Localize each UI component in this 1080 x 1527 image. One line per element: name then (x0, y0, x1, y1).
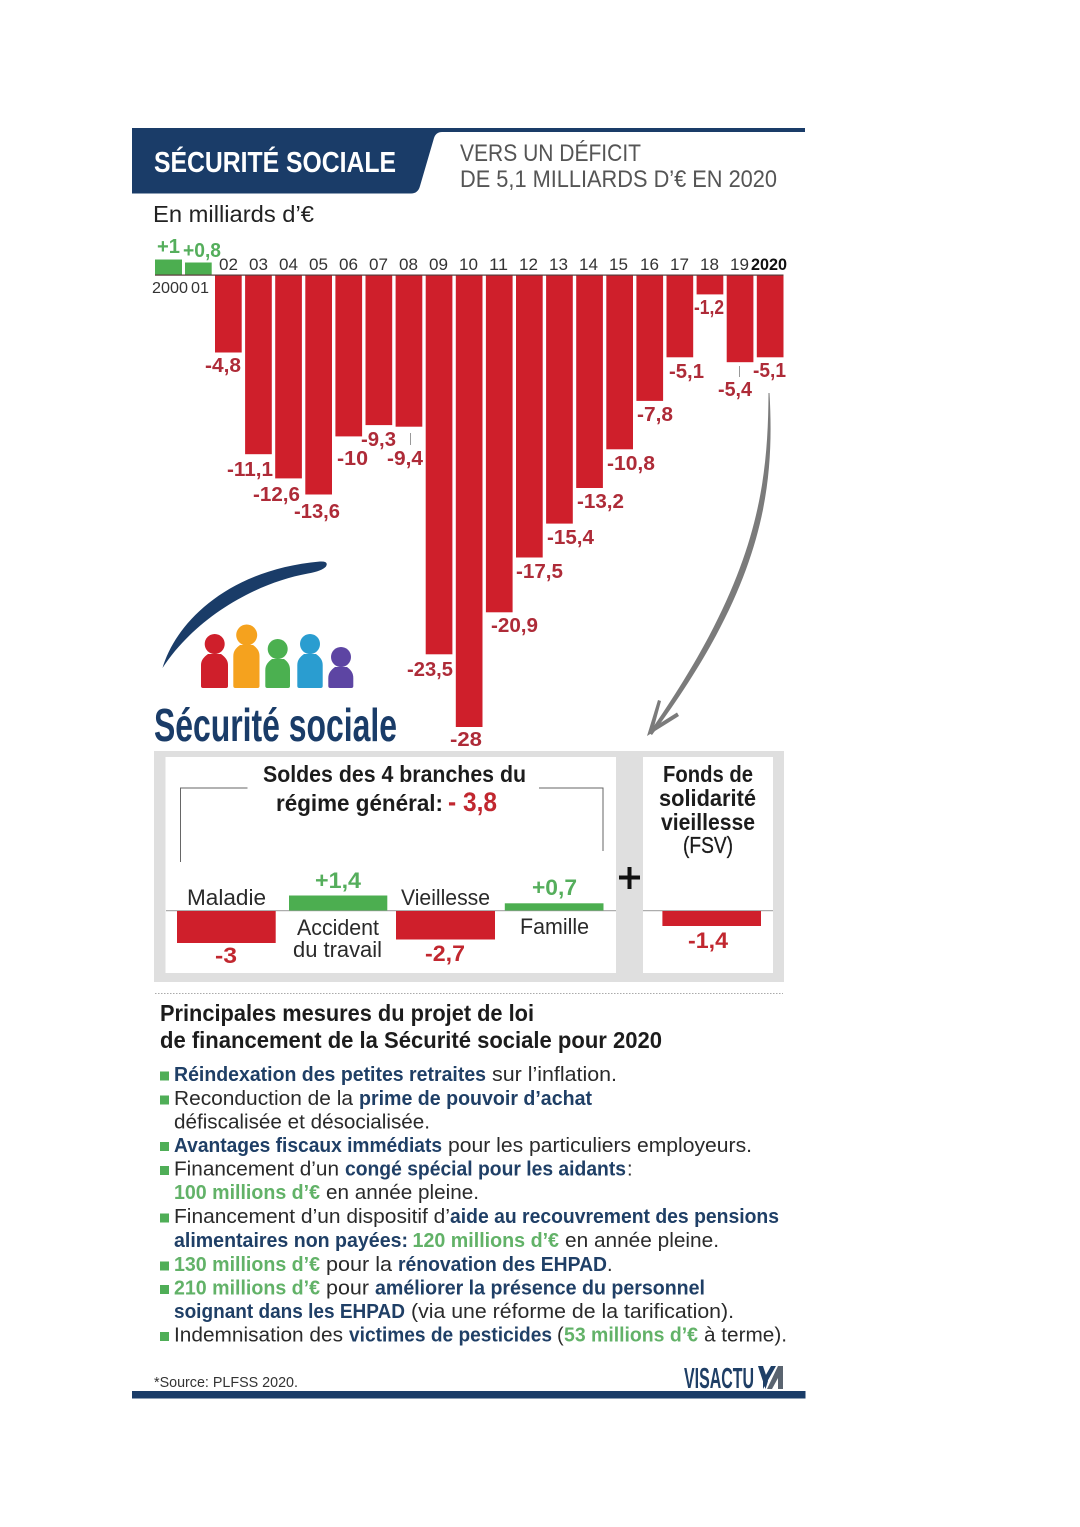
source: *Source: PLFSS 2020. (154, 1374, 298, 1391)
year labels: 13 (549, 255, 568, 274)
FSV heading: vieillesse (661, 809, 755, 835)
measure: purchasing power bonus: prime de pouvoir d’achat (359, 1088, 592, 1110)
branch labels: du travail (293, 937, 382, 962)
measure: pensions: Réindexation des petites retraites (174, 1064, 486, 1086)
measure: nursing home renovation: . (607, 1254, 613, 1276)
panel heading: general scheme: régime général: (276, 790, 443, 816)
measure: pesticide victims: Indemnisation des (174, 1324, 343, 1346)
bar chart: annual balance 2000-2020 (152, 236, 787, 751)
year labels: 05 (309, 255, 328, 274)
branch labels: -2,7 (425, 941, 465, 966)
panel: branches balance and FSV (154, 751, 784, 982)
heading: main measures: de financement de la Sécurité sociale pour 2020 (160, 1027, 662, 1053)
negative bars (215, 275, 784, 727)
measure: care staff: (via une réforme de la tarification). (411, 1301, 734, 1323)
measure: pensions: sur l’inflation. (492, 1064, 617, 1086)
list of measures (160, 1064, 787, 1346)
branch labels: -3 (215, 943, 237, 968)
value labels: +0,8 (183, 240, 221, 262)
value labels: -9,3 (361, 429, 396, 451)
measure: caregiver leave: congé spécial pour les aidants (345, 1158, 626, 1180)
unit label: En milliards d’€ (153, 201, 314, 227)
measure: purchasing power bonus (174, 1088, 592, 1134)
year labels: 07 (369, 255, 388, 274)
year labels: 02 (219, 255, 238, 274)
measure: alimony recovery: alimentaires non payées: (174, 1230, 408, 1252)
value labels: -13,6 (294, 501, 340, 523)
measure: nursing home renovation: rénovation des EHPAD (398, 1254, 607, 1276)
measure: nursing home renovation: 130 millions d’€ (174, 1254, 320, 1276)
value labels: -7,8 (637, 404, 673, 426)
value labels: -23,5 (407, 659, 453, 681)
measure: pesticide victims: 53 millions d’€ (564, 1324, 698, 1346)
FSV heading: Fonds de (663, 761, 753, 787)
value labels: -12,6 (253, 484, 300, 506)
bottom rule (132, 1391, 806, 1398)
measure: care staff: améliorer la présence du personnel (375, 1278, 705, 1300)
FSV heading: (FSV) (683, 832, 733, 858)
panel heading: general scheme: Soldes des 4 branches du (263, 761, 526, 787)
year labels: 10 (459, 255, 478, 274)
year labels: 03 (249, 255, 268, 274)
measure: care staff: pour (326, 1278, 369, 1300)
value labels: -5,4 (718, 379, 753, 401)
branch labels: Famille (520, 914, 589, 939)
measure: caregiver leave (174, 1158, 633, 1204)
measure: tax benefits: pour les particuliers employeurs. (448, 1135, 752, 1157)
value labels: -20,9 (491, 615, 538, 637)
branch labels: Vieillesse (401, 885, 490, 910)
logo: Visactu: VISACTU (684, 1363, 754, 1395)
FSV heading (659, 761, 756, 858)
branch labels: +0,7 (532, 875, 577, 900)
measure: alimony recovery: aide au recouvrement des pensions (450, 1206, 779, 1228)
measure: care staff (174, 1278, 734, 1323)
subtitle (460, 140, 777, 193)
measure: tax benefits (174, 1135, 752, 1157)
branch bars (177, 896, 604, 943)
panel heading: general scheme (263, 761, 526, 817)
measure: tax benefits: Avantages fiscaux immédiats (174, 1135, 442, 1157)
FSV bar: -1,4 (688, 928, 729, 953)
year labels: 17 (670, 255, 689, 274)
measure: caregiver leave: : (627, 1158, 633, 1180)
year labels: 11 (489, 255, 508, 274)
year labels: 06 (339, 255, 358, 274)
value labels: -1,2 (694, 297, 724, 319)
measure: caregiver leave: Financement d’un (174, 1158, 339, 1180)
bullets (160, 1072, 169, 1341)
value labels: -11,1 (227, 459, 273, 481)
measure: pesticide victims: à terme). (704, 1324, 787, 1346)
measure: purchasing power bonus: Reconduction de la (174, 1088, 354, 1110)
arrow: from 2020 deficit to breakdown (647, 393, 771, 736)
value labels: +1 (157, 236, 180, 258)
year labels: 14 (579, 255, 598, 274)
branch labels (187, 868, 589, 968)
year labels: 12 (519, 255, 538, 274)
FSV bar (662, 911, 761, 953)
measure: purchasing power bonus: défiscalisée et désocialisée. (174, 1112, 430, 1134)
measure: alimony recovery (174, 1206, 779, 1252)
measure: care staff: 210 millions d’€ (174, 1278, 320, 1300)
measure: alimony recovery: en année pleine. (565, 1230, 719, 1252)
plus sign (619, 867, 640, 889)
heading: main measures: Principales mesures du projet de loi (160, 1000, 534, 1026)
value labels: -5,1 (753, 360, 786, 382)
value labels: -10,8 (607, 453, 655, 475)
subtitle: DE 5,1 MILLIARDS D’€ EN 2020 (460, 166, 777, 193)
icon: swoosh (162, 561, 327, 668)
logo: Sécurité sociale (154, 561, 397, 751)
value labels: -4,8 (205, 355, 241, 377)
branch labels: +1,4 (315, 868, 362, 893)
value labels: -15,4 (547, 527, 595, 549)
value labels: -9,4 (387, 448, 424, 470)
subtitle: VERS UN DÉFICIT (460, 140, 641, 167)
measure: nursing home renovation: pour la (326, 1254, 393, 1276)
FSV heading: solidarité (659, 785, 756, 811)
measure: pesticide victims (174, 1324, 787, 1346)
measure: caregiver leave: en année pleine. (326, 1182, 479, 1204)
year labels: 18 (700, 255, 719, 274)
year labels: 19 (730, 255, 749, 274)
value labels: -10 (337, 448, 368, 470)
year labels: 2000 (152, 280, 188, 297)
measure: pesticide victims: ( (557, 1324, 564, 1346)
measure: care staff: soignant dans les EHPAD (174, 1301, 405, 1323)
year labels: 16 (640, 255, 659, 274)
measure: caregiver leave: 100 millions d’€ (174, 1182, 320, 1204)
value labels (157, 236, 786, 751)
year labels: 2020 (751, 255, 787, 274)
header banner (132, 128, 805, 194)
branch labels: Maladie (187, 885, 266, 910)
heading: main measures (160, 1000, 662, 1053)
title: SÉCURITÉ SOCIALE (154, 145, 396, 179)
year labels: 04 (279, 255, 298, 274)
panel heading: general scheme: - 3,8 (448, 787, 497, 817)
measure: alimony recovery: 120 millions d’€ (412, 1230, 559, 1252)
branch labels: Accident (297, 915, 379, 940)
value labels: -28 (450, 729, 482, 751)
measure: nursing home renovation (174, 1254, 613, 1276)
measure: pesticide victims: victimes de pesticides (349, 1324, 552, 1346)
value labels: -13,2 (577, 491, 624, 513)
value labels: -17,5 (516, 561, 563, 583)
year labels (152, 255, 787, 297)
icon: five people (201, 624, 353, 688)
year labels: 08 (399, 255, 418, 274)
logo wordmark: Sécurité sociale (154, 699, 397, 751)
value labels: -5,1 (669, 361, 704, 383)
year labels: 01 (191, 280, 209, 297)
year labels: 09 (429, 255, 448, 274)
positive bars (155, 260, 212, 275)
year labels: 15 (609, 255, 628, 274)
measure: alimony recovery: Financement d’un dispositif d’ (174, 1206, 450, 1228)
